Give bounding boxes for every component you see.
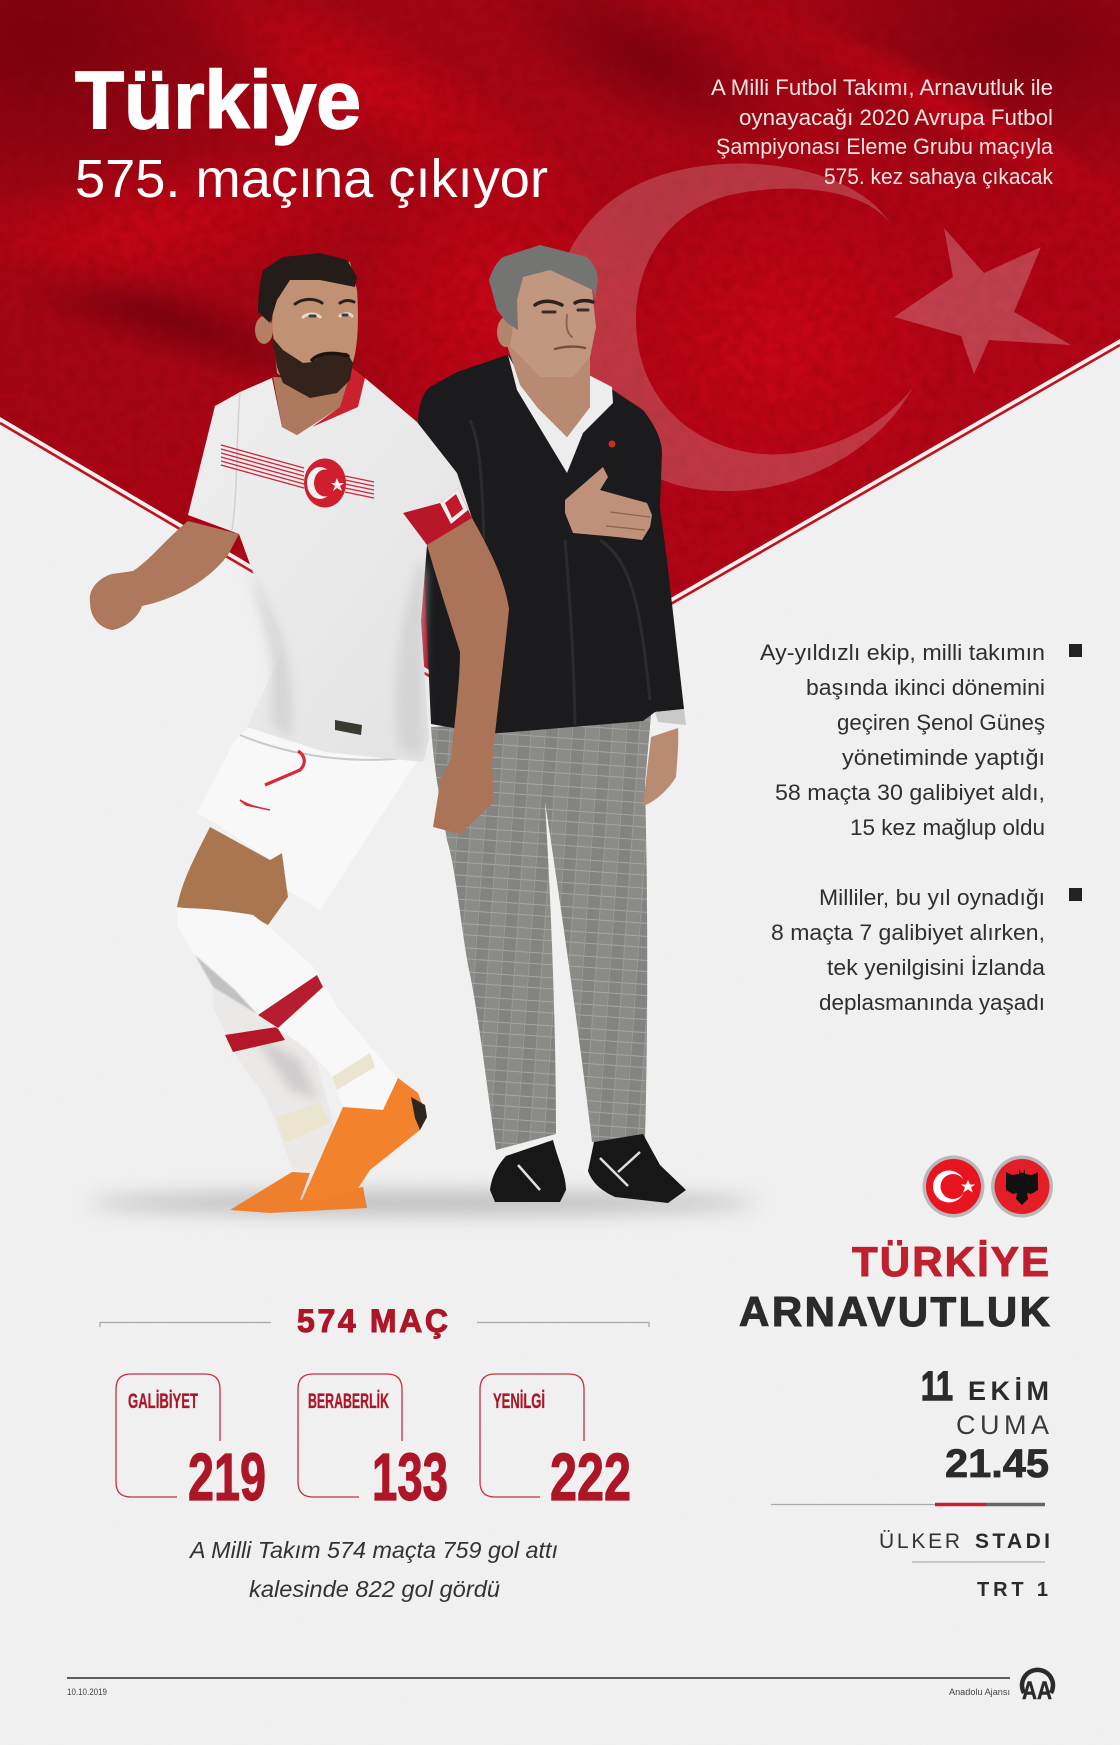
coach ear	[497, 317, 515, 347]
player front sock	[177, 908, 397, 1110]
player front boot	[302, 1078, 427, 1200]
goals note: kalesinde 822 gol gördü	[249, 1576, 500, 1602]
goals note	[188, 1537, 558, 1602]
coach head	[510, 262, 596, 377]
bullet icon	[1069, 644, 1082, 657]
player neck	[273, 377, 352, 435]
stat: losses: YENİLGİ	[493, 1390, 545, 1413]
jersey stripes	[221, 445, 374, 498]
panel: 574 match stats	[100, 1303, 649, 1602]
coach shoes	[490, 1134, 686, 1203]
player left arm	[90, 521, 239, 630]
intro text: A Milli Futbol Takımı, Arnavutluk ile	[711, 75, 1053, 100]
venue	[879, 1530, 1050, 1553]
date and time: EKİM	[968, 1376, 1049, 1406]
paragraph: coach record: Ay-yıldızlı ekip, milli takımın	[760, 640, 1045, 665]
heading: 574 MAÇ	[297, 1303, 448, 1339]
coach trousers	[431, 715, 651, 1150]
credit: Anadolu Ajansı	[949, 1687, 1010, 1698]
coach lapel pin	[608, 440, 616, 448]
coach shirt	[508, 355, 613, 473]
stat: draws: 133	[372, 1440, 448, 1515]
date: 10.10.2019	[67, 1687, 107, 1698]
player face details	[295, 299, 354, 360]
panel: red flag banner	[0, 0, 1120, 720]
coach neck	[507, 345, 590, 437]
coach hand on chest	[565, 467, 652, 540]
icon: Albania flag	[991, 1156, 1053, 1218]
paragraph: this year	[771, 885, 1046, 1015]
bullet text block	[760, 640, 1082, 1015]
player beard	[272, 337, 353, 398]
date and time: CUMA	[956, 1410, 1049, 1440]
title: Türkiye	[75, 55, 361, 146]
goals note: A Milli Takım 574 maçta 759 gol attı	[188, 1537, 558, 1563]
figure: player	[90, 253, 509, 1213]
player head	[272, 262, 358, 397]
paragraph: coach record	[760, 640, 1045, 840]
venue: STADI	[975, 1530, 1050, 1553]
player ear	[255, 316, 273, 344]
team names: TÜRKİYE	[852, 1238, 1049, 1285]
player right arm	[427, 518, 509, 834]
ground shadow	[88, 1192, 758, 1214]
title: 575. maçına çıkıyor	[75, 149, 548, 209]
player armband	[403, 488, 472, 545]
paragraph: this year: tek yenilgisini İzlanda	[827, 955, 1046, 980]
flag star	[894, 228, 1071, 374]
stat: wins: 219	[188, 1440, 266, 1515]
intro text	[711, 75, 1054, 189]
date and time: 21.45	[945, 1442, 1049, 1486]
date and time: 11	[921, 1363, 953, 1409]
intro text: Şampiyonası Eleme Grubu maçıyla	[716, 134, 1053, 159]
venue: ÜLKER	[879, 1530, 960, 1553]
banner border lines	[0, 345, 1120, 710]
intro text: 575. kez sahaya çıkacak	[824, 164, 1054, 189]
paragraph: coach record: geçiren Şenol Güneş	[837, 710, 1045, 735]
title	[75, 55, 548, 209]
coach jacket	[418, 355, 684, 734]
footer	[67, 1670, 1053, 1705]
player shorts	[197, 727, 430, 910]
player back boot	[230, 1172, 367, 1213]
flag crescent	[553, 164, 913, 491]
paragraph: coach record: başında ikinci dönemini	[806, 675, 1045, 700]
icon: Turkey flag	[922, 1156, 984, 1218]
stat: draws: BERABERLİK	[308, 1390, 389, 1413]
player jersey	[188, 378, 472, 762]
player hair	[258, 253, 357, 323]
bullet icon	[1069, 888, 1082, 901]
player thigh	[177, 827, 288, 925]
icon: AA logo: AA	[1022, 1677, 1052, 1705]
stat: losses	[480, 1374, 631, 1515]
stat: draws	[298, 1374, 448, 1515]
coach watch and hand	[643, 709, 686, 806]
intro text: oynayacağı 2020 Avrupa Futbol	[739, 105, 1053, 130]
paragraph: this year: Milliler, bu yıl oynadığı	[819, 885, 1045, 910]
paragraph: coach record: 58 maçta 30 galibiyet aldı,	[775, 780, 1045, 805]
player back leg	[213, 987, 337, 1172]
date and time	[921, 1363, 1049, 1486]
coach hair	[489, 245, 598, 330]
team names: ARNAVUTLUK	[739, 1288, 1050, 1335]
broadcaster: TRT 1	[977, 1579, 1048, 1601]
team names	[739, 1238, 1050, 1335]
stat: losses: 222	[550, 1440, 631, 1515]
paragraph: this year: deplasmanında yaşadı	[819, 990, 1045, 1015]
coach face details	[535, 301, 593, 349]
paragraph: coach record: yönetiminde yaptığı	[842, 745, 1045, 770]
stat: wins	[116, 1374, 266, 1515]
jersey collar	[312, 368, 365, 427]
figure: coach	[418, 245, 686, 1203]
panel: match info	[739, 1156, 1053, 1601]
jersey badge	[304, 458, 346, 508]
stat: wins: GALİBİYET	[128, 1390, 198, 1413]
venue divider	[771, 1504, 1045, 1506]
paragraph: this year: 8 maçta 7 galibiyet alırken,	[771, 920, 1045, 945]
paragraph: coach record: 15 kez mağlup oldu	[850, 815, 1045, 840]
